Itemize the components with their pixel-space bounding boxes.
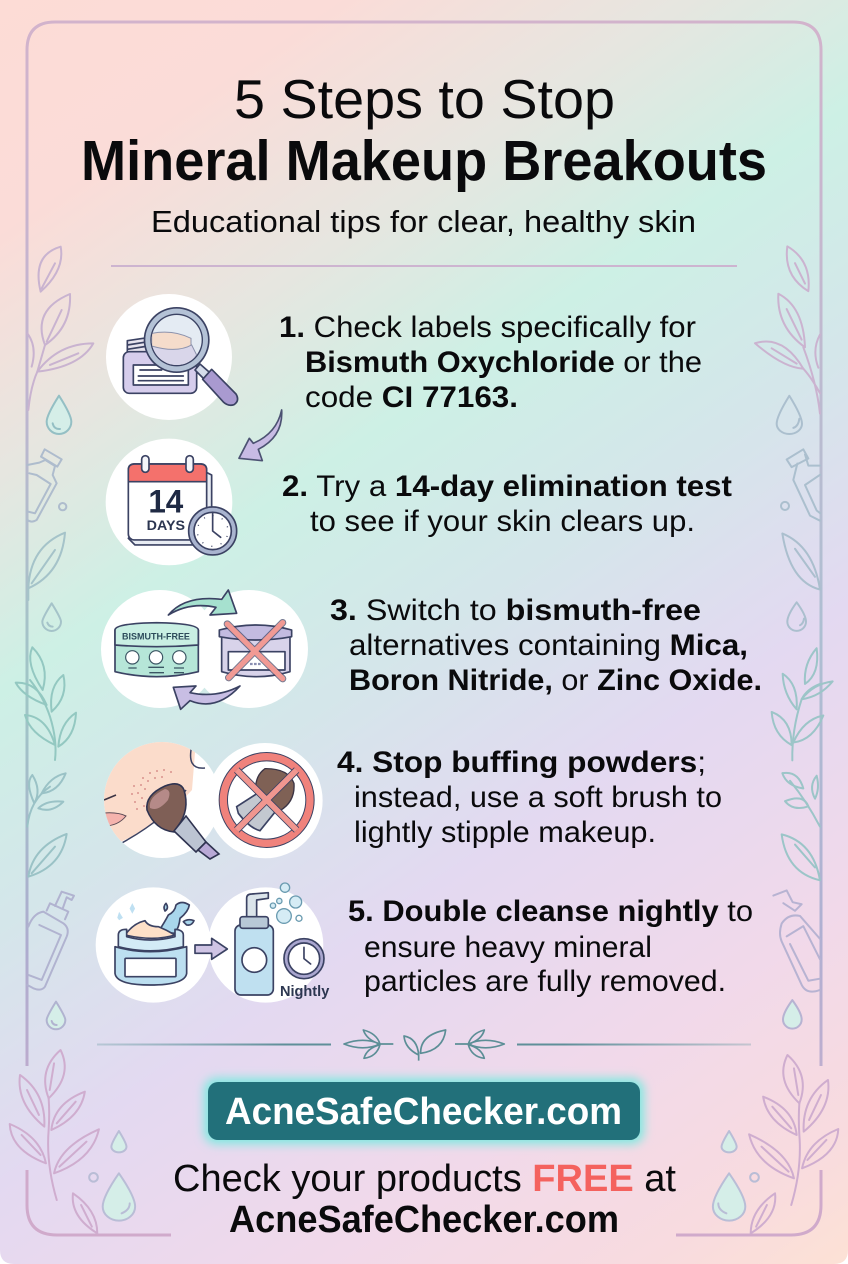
step 5 icon: cleanse jar to foam bottle: Nightly <box>280 984 330 1000</box>
bottom left botanical decoration <box>10 1050 135 1233</box>
bottom right botanical decoration <box>713 1055 838 1233</box>
step 2 icon: calendar and clock: 14 <box>148 483 183 520</box>
call-to-action button: AcneSafeChecker.com <box>225 1091 622 1133</box>
step 3 icon: swap to bismuth-free jar: BISMUTH-FREE <box>122 631 190 641</box>
step 5 text: particles are fully removed. <box>364 965 726 998</box>
step 3 text: alternatives containing Mica, <box>349 629 748 662</box>
right botanical decoration <box>755 246 833 1029</box>
step 5 text: 5. Double cleanse nightly to <box>348 895 753 928</box>
step 1 text: Bismuth Oxychloride or the <box>305 346 702 379</box>
step 1 text: 1. Check labels specifically for <box>279 311 696 344</box>
title: 5 Steps to Stop <box>234 68 615 130</box>
step 4 text: lightly stipple makeup. <box>354 816 656 849</box>
step 1 text <box>279 311 702 414</box>
title: Mineral Makeup Breakouts <box>81 129 767 193</box>
step 2 icon: calendar and clock: DAYS <box>147 517 185 533</box>
step 1 text: code CI 77163. <box>305 381 518 414</box>
step 4 icon: no buffing brush <box>207 743 323 858</box>
left botanical decoration: lower <box>16 647 76 1029</box>
step 1 icon: jar and magnifier <box>106 294 238 420</box>
step 2 text <box>282 470 732 538</box>
step 5 icon: cleanse jar to foam bottle <box>96 883 330 1003</box>
step 2 text: 2. Try a 14-day elimination test <box>282 470 732 503</box>
step 4 text <box>337 746 722 849</box>
divider under the subtitle <box>111 265 737 267</box>
step 5 text <box>348 895 753 998</box>
lower divider with leaf ornament <box>97 1030 751 1061</box>
step 4 text: instead, use a soft brush to <box>354 781 722 814</box>
step 3 text: 3. Switch to bismuth-free <box>330 594 701 627</box>
title <box>81 68 767 193</box>
step 3 text: Boron Nitride, or Zinc Oxide. <box>349 664 762 697</box>
step 2 icon: calendar and clock <box>106 439 237 565</box>
step 3 icon: swap to bismuth-free jar <box>101 590 308 709</box>
step 4 icon: face with brush <box>100 740 220 859</box>
step 3 text <box>330 594 762 697</box>
step 2 text: to see if your skin clears up. <box>310 505 695 538</box>
subtitle: Educational tips for clear, healthy skin <box>151 204 696 239</box>
closing call to action text: AcneSafeChecker.com <box>229 1199 619 1241</box>
arrow from step 1 to step 2 <box>239 410 282 461</box>
closing call to action text <box>173 1158 676 1241</box>
call-to-action button <box>204 1078 644 1144</box>
step 5 text: ensure heavy mineral <box>364 931 652 964</box>
closing call to action text: Check your products FREE at <box>173 1158 676 1200</box>
left botanical decoration: upper <box>27 247 93 631</box>
step 4 text: 4. Stop buffing powders ; <box>337 746 706 779</box>
